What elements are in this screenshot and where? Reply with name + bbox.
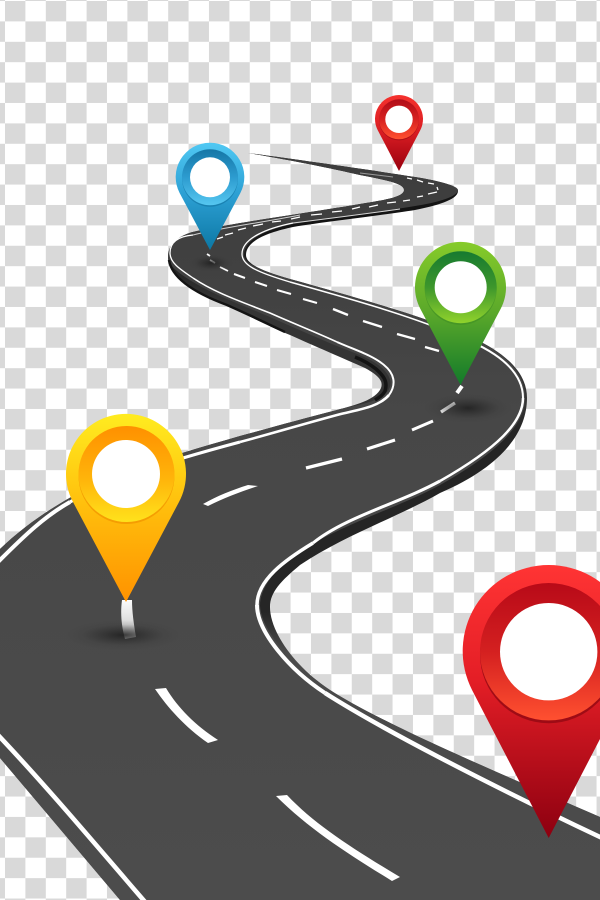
- pin body: [415, 242, 506, 385]
- pin ring: [78, 426, 174, 524]
- yellow pin: [66, 414, 186, 602]
- pin body: [463, 565, 600, 838]
- centre lane dashes: [121, 178, 462, 881]
- small red pin: [375, 95, 423, 171]
- pin body: [66, 414, 186, 602]
- white edge line: outer side: [0, 173, 394, 900]
- pin centre: [500, 603, 597, 700]
- white edge line: inner side: [242, 209, 600, 838]
- pin ring: [379, 99, 419, 140]
- blue pin: [176, 143, 244, 250]
- ground shadows under pins: [65, 254, 512, 650]
- green pin: [415, 242, 506, 385]
- pin ring: [425, 251, 497, 325]
- pin centre: [190, 157, 230, 197]
- pin ring: [182, 149, 238, 207]
- large red pin: [463, 565, 600, 838]
- pin body: [176, 143, 244, 250]
- pin body: [375, 95, 423, 171]
- pin ring: [480, 583, 600, 723]
- pin centre: [385, 106, 413, 133]
- pin centre: [92, 440, 160, 508]
- dark shading on road side at bends: [169, 260, 386, 400]
- pin centre: [435, 261, 487, 313]
